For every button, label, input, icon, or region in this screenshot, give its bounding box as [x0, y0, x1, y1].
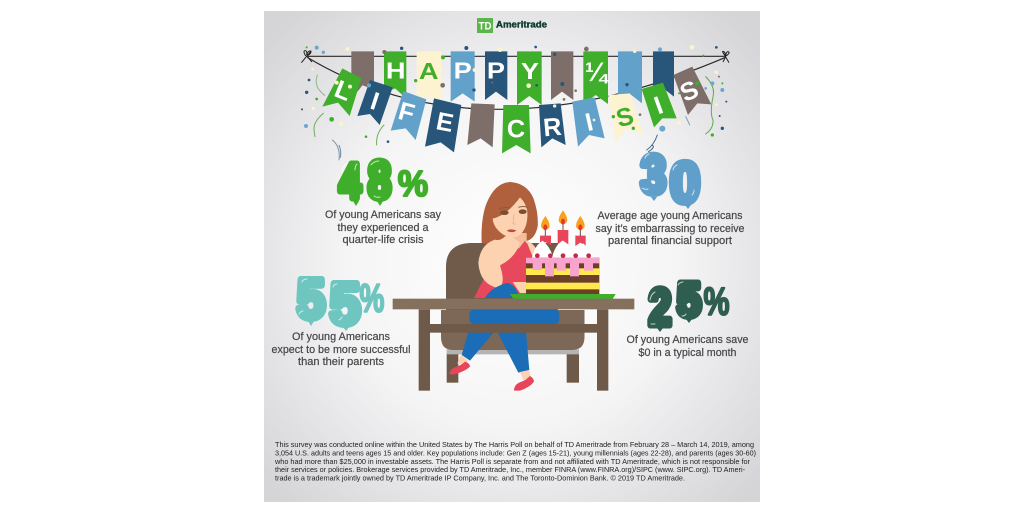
logo: TD Ameritrade: Ameritrade — [496, 20, 547, 30]
text: survey footnote: 3,054 U.S. adults and teens ages 15 and older. Key populations include: Gen Z (ages 15-21), young millennials (ages 22-28), and parents (ages 30-60) — [275, 448, 756, 458]
stat: 48% balloon number — [339, 145, 428, 210]
bottom row flags: C — [507, 115, 525, 143]
illustration: woman with birthday cake at table — [393, 182, 634, 391]
bottom row flags: S — [613, 102, 637, 133]
right shoulder — [526, 241, 538, 258]
text: 30 caption: Average age young Americans — [598, 210, 743, 222]
woman — [474, 182, 538, 298]
neck — [510, 233, 527, 253]
top — [474, 240, 535, 298]
text: 48% caption: quarter-life crisis — [342, 234, 424, 246]
stat: 48% balloon number: 4 — [339, 155, 361, 209]
top row flags: P — [487, 58, 505, 84]
text: 30 caption — [596, 210, 744, 247]
arm and hand — [478, 236, 520, 288]
text: survey footnote: who had more than $25,000 in investable assets. The Harris Poll is separate from and not affiliated with TD Ameritrade, which is not responsible for — [274, 457, 751, 466]
stat: 55% balloon number: 5 — [297, 269, 325, 331]
text: 48% caption — [325, 209, 441, 246]
stat: 48% balloon number: % — [398, 164, 428, 204]
bottom row flags — [322, 67, 711, 153]
hand on knee — [513, 282, 527, 293]
logo: TD Ameritrade — [477, 18, 547, 33]
chair — [441, 243, 584, 383]
bow: right — [722, 51, 729, 63]
string: top — [307, 55, 726, 58]
stat: 30 balloon number: 0 — [670, 151, 700, 214]
stat: 25% balloon number: 5 — [677, 273, 701, 327]
text: survey footnote: trade is a trademark jointly owned by TD Ameritrade IP Company, Inc. and The Toronto-Dominion Bank. © 2019 TD Ameritrade. — [275, 474, 685, 482]
face — [493, 197, 527, 237]
bottom row flags: F — [395, 97, 418, 128]
top row flags: ¼ — [585, 57, 609, 87]
logo: TD Ameritrade: TD — [478, 20, 492, 32]
text: 55% caption: Of young Americans — [292, 331, 390, 343]
bottom row flags: I — [367, 87, 382, 116]
top row flags: Y — [521, 59, 539, 84]
bottom row flags: R — [542, 113, 563, 142]
text: 30 caption: parental financial support — [608, 235, 732, 247]
stat: 55% balloon number: 5 — [330, 272, 360, 336]
bottom row flags: L — [331, 75, 355, 107]
text: 25% caption: $0 in a typical month — [638, 347, 736, 359]
text: 25% caption — [626, 334, 748, 359]
top row flags: A — [419, 59, 438, 84]
text: 30 caption: say it’s embarrassing to receive — [596, 223, 744, 235]
text: 48% caption: they experienced a — [338, 222, 429, 234]
eyes and brows — [499, 206, 528, 232]
banner: Happy 1/4 Life Crisis bunting — [301, 45, 729, 160]
stat: 25% balloon number — [649, 273, 730, 336]
bottom row flags: E — [434, 107, 456, 138]
bottom row flags: I — [651, 92, 667, 120]
top row flags: H — [386, 59, 405, 84]
text: survey footnote: This survey was conducted online within the United States by The Harris Poll on behalf of TD Ameritrade from February 28 – March 14, 2019, among — [275, 440, 754, 449]
stat: 25% balloon number: 2 — [649, 278, 671, 336]
raised knee — [485, 283, 520, 298]
jeans and shoes — [449, 309, 559, 391]
bottom row flags: I — [583, 108, 596, 137]
panel: infographic background — [264, 11, 760, 502]
text: 48% caption: Of young Americans say — [325, 209, 441, 221]
bottom row flags: S — [676, 75, 703, 108]
streamers and confetti — [301, 45, 727, 160]
table — [393, 299, 634, 391]
bow: left — [301, 51, 312, 63]
stat: 48% balloon number: 8 — [368, 151, 391, 210]
top row flags: P — [454, 58, 472, 84]
stat: 25% balloon number: % — [703, 281, 730, 324]
string: lower — [307, 57, 726, 109]
stat: 30 balloon number: 3 — [641, 145, 666, 205]
stat: 55% balloon number: % — [360, 277, 384, 321]
text: 55% caption — [272, 331, 410, 368]
stat: 55% balloon number — [297, 269, 384, 336]
hair — [482, 182, 538, 245]
stat: 30 balloon number — [641, 145, 700, 214]
text: 55% caption: expect to be more successful — [272, 344, 410, 356]
text: survey footnote: their services or policies. Brokerage services provided by TD Ameritrade, Inc., member FINRA (www.FINRA.org)/SIPC (www. SIPC.org). TD Ameri- — [275, 465, 746, 474]
text: survey footnote — [274, 440, 756, 482]
text: 25% caption: Of young Americans save — [626, 334, 748, 346]
top row flags — [351, 51, 674, 105]
birthday cake — [510, 210, 616, 299]
text: 55% caption: than their parents — [298, 356, 384, 368]
